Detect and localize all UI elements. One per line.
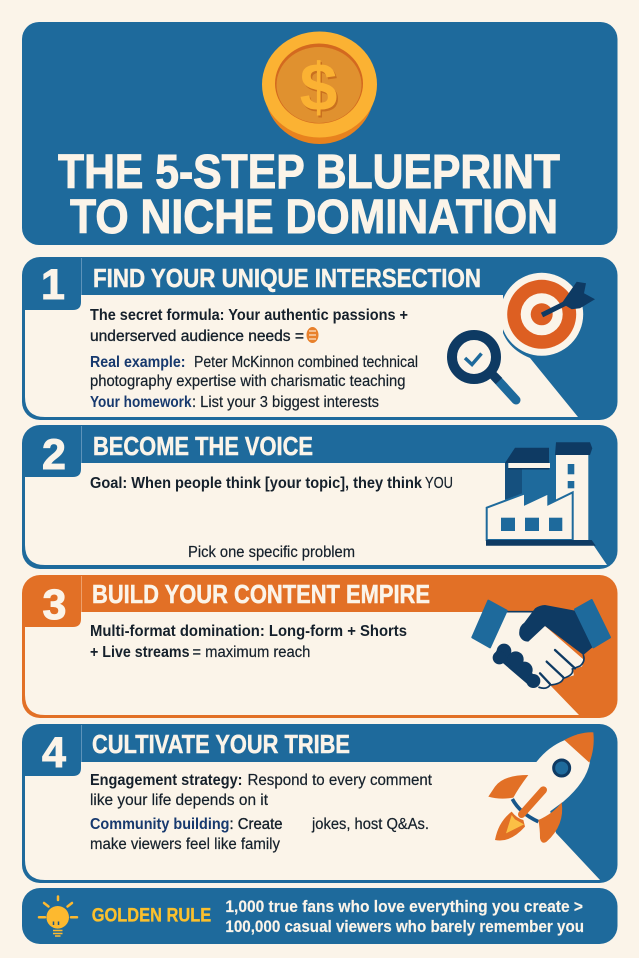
text block: multi-format domination: Multi-format domination: Long-form + Shorts (90, 623, 407, 640)
text block: real example: photography expertise with charismatic teaching (90, 373, 406, 390)
text block: homework (90, 394, 379, 411)
step number 3: 3 (43, 581, 66, 629)
icon: target with dart (500, 273, 595, 356)
icon: gold dollar coin: $ (301, 52, 339, 128)
text block: multi-format domination: = maximum reach (192, 644, 310, 661)
step number 1: 1 (41, 261, 65, 309)
panel: header banner (22, 22, 618, 245)
text block: pick one problem: Pick one specific problem (188, 544, 355, 561)
callout text: 1,000 true fans who love everything you create > (225, 897, 583, 916)
icon: rocket (488, 732, 594, 843)
text block: community building (90, 816, 429, 853)
text block: engagement strategy: Engagement strategy: (90, 772, 242, 789)
panel: step 1 (22, 257, 618, 420)
text block: real example: Peter McKinnon combined technical (194, 354, 418, 371)
icon: magnifying glass with check (452, 335, 516, 400)
text block: multi-format domination: + Live streams (90, 644, 190, 661)
text block: community building: jokes, host Q&As. (311, 816, 429, 833)
icon: gold dollar coin (262, 32, 377, 144)
heading: become the voice: BECOME THE VOICE (93, 431, 313, 461)
text block: community building: Community building (90, 816, 230, 833)
title (58, 146, 560, 244)
text block: engagement strategy: like your life depends on it (90, 792, 269, 809)
text block: engagement strategy: Respond to every comment (248, 772, 433, 789)
text block: secret formula: underserved audience needs = (90, 328, 304, 345)
text block: secret formula: The secret formula: Your authentic passions + (90, 307, 408, 324)
panel: step 2 (22, 425, 618, 569)
step number 2: 2 (42, 431, 66, 479)
title: TO NICHE DOMINATION (70, 191, 558, 244)
callout label: golden rule: GOLDEN RULE (92, 904, 211, 926)
panel: step 4 (22, 724, 618, 883)
text block: homework: : List your 3 biggest interests (192, 394, 379, 411)
text block: homework: Your homework (90, 394, 192, 411)
text block: community building: make viewers feel like family (90, 836, 280, 853)
heading: build your content empire: BUILD YOUR CONTENT EMPIRE (92, 579, 430, 609)
step number 4: 4 (42, 729, 66, 777)
text block: multi-format domination (90, 623, 407, 661)
panel: step 3 (22, 575, 618, 718)
heading: cultivate your tribe: CULTIVATE YOUR TRIBE (92, 729, 350, 759)
text block: secret formula (90, 307, 408, 345)
text block: real example: Real example: (90, 354, 186, 371)
text block: engagement strategy (90, 772, 433, 809)
text block: goal: Goal: When people think [your topic], they think (90, 475, 422, 492)
panel: golden rule (22, 888, 618, 944)
icon: handshake (472, 600, 610, 689)
icon: gold dollar coin: $ (300, 50, 337, 126)
icon: factory (486, 442, 596, 546)
text block: community building: : Create (230, 816, 282, 833)
text block: goal: YOU (425, 475, 453, 492)
title: THE 5-STEP BLUEPRINT (58, 146, 560, 199)
heading: find your unique intersection: FIND YOUR UNIQUE INTERSECTION (93, 263, 481, 293)
callout text: 100,000 casual viewers who barely remember you (225, 917, 584, 936)
callout text (225, 897, 584, 936)
text block: real example (90, 354, 418, 390)
icon: light bulb (39, 896, 77, 936)
